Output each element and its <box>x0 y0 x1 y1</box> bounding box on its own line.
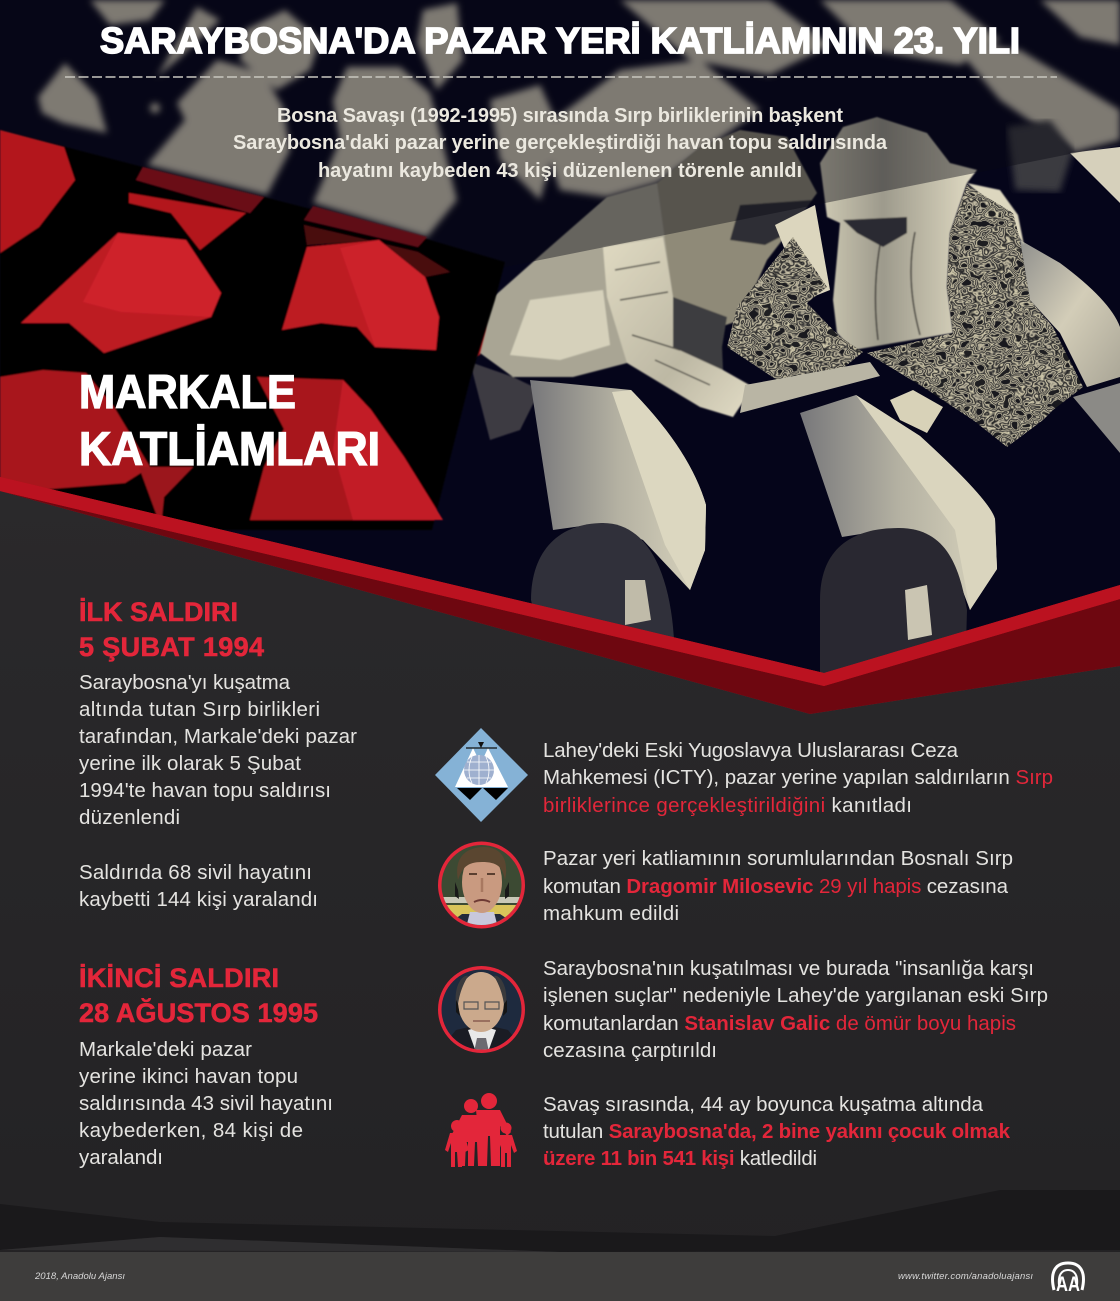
second attack section <box>79 963 333 1169</box>
coffin middle <box>800 395 997 610</box>
background photo illustration <box>0 0 1120 720</box>
first attack text: tarafından, Markale'deki pazar <box>79 725 357 748</box>
upper row of coffins <box>38 0 1120 237</box>
top dark overlay <box>0 0 1120 268</box>
Galic text: Saraybosna'nın kuşatılması ve burada "insanlığa karşı <box>543 957 1034 980</box>
footer url: www.twitter.com/anadoluajansı <box>898 1271 1033 1282</box>
coffin left <box>530 380 706 590</box>
woman right scarf <box>820 117 1024 350</box>
Milosevic text <box>543 847 1013 925</box>
first attack text: Saldırıda 68 sivil hayatını <box>79 861 312 884</box>
first attack text: yerine ilk olarak 5 Şubat <box>79 752 301 775</box>
right coffin lower <box>1073 383 1120 453</box>
icon: family <box>445 1093 517 1167</box>
title: SARAYBOSNA'DA PAZAR YERİ KATLİAMININ 23. YILI <box>100 20 1020 61</box>
woman left <box>457 130 817 440</box>
second attack heading: 28 AĞUSTOS 1995 <box>79 997 318 1028</box>
ICTY text: birliklerince gerçekleştirildiğini kanıtladı <box>543 794 912 817</box>
second attack heading <box>79 963 318 1028</box>
Milosevic text: komutan Dragomir Milosevic 29 yıl hapis cezasına <box>543 875 1009 898</box>
embroidered sleeves <box>867 185 1083 447</box>
main heading: MARKALE <box>79 365 296 418</box>
second attack text: saldırısında 43 sivil hayatını <box>79 1092 333 1115</box>
second attack text: kaybederken, 84 kişi de <box>79 1119 303 1142</box>
title divider <box>65 76 1057 78</box>
AA logo: AA <box>1056 1273 1080 1296</box>
casualties text: Savaş sırasında, 44 ay boyunca kuşatma altında <box>543 1093 984 1116</box>
Galic text: işlenen suçlar" nedeniyle Lahey'de yargılanan eski Sırp <box>543 984 1048 1007</box>
subtitle: Saraybosna'daki pazar yerine gerçekleştirdiği havan topu saldırısında <box>233 132 888 154</box>
second attack text: Markale'deki pazar <box>79 1038 252 1061</box>
hand <box>890 390 943 433</box>
first attack text: Saraybosna'yı kuşatma <box>79 671 291 694</box>
red coffins <box>0 130 505 530</box>
Milosevic text: Pazar yeri katliamının sorumlularından Bosnalı Sırp <box>543 847 1013 870</box>
lower dark panel with red chevron <box>0 477 1120 1301</box>
footer credit: 2018, Anadolu Ajansı <box>34 1271 125 1282</box>
casualties text: üzere 11 bin 541 kişi katledildi <box>543 1147 817 1170</box>
ICTY text: Lahey'deki Eski Yugoslavya Uluslararası Ceza <box>543 739 959 762</box>
ICTY text: Mahkemesi (ICTY), pazar yerine yapılan saldırıların Sırp <box>543 766 1053 789</box>
first attack text: düzenlendi <box>79 806 180 829</box>
second attack text: yerine ikinci havan topu <box>79 1065 298 1088</box>
icon: ICTY emblem <box>435 728 528 822</box>
right coffin upper <box>1020 240 1120 387</box>
portrait: Stanislav Galic <box>438 966 526 1054</box>
casualties text: tutulan Saraybosna'da, 2 bine yakını çocuk olmak <box>543 1120 1011 1143</box>
first attack text: kaybetti 144 kişi yaralandı <box>79 888 318 911</box>
pale triangle by face <box>775 205 830 300</box>
subtitle <box>233 105 888 182</box>
casualties text <box>543 1093 1011 1170</box>
first attack text <box>79 671 357 911</box>
subtitle: hayatını kaybeden 43 kişi düzenlenen törenle anıldı <box>318 160 802 182</box>
darker band <box>0 1190 1120 1252</box>
first attack text: 1994'te havan topu saldırısı <box>79 779 331 802</box>
Galic text: komutanlardan Stanislav Galic de ömür boyu hapis <box>543 1012 1016 1035</box>
second attack text <box>79 1038 333 1169</box>
second attack text: yaralandı <box>79 1146 163 1169</box>
ICTY text <box>543 739 1053 817</box>
subtitle: Bosna Savaşı (1992-1995) sırasında Sırp birliklerinin başkent <box>277 105 843 127</box>
Galic text <box>543 957 1048 1062</box>
main heading <box>79 365 380 475</box>
Galic text: cezasına çarptırıldı <box>543 1039 717 1062</box>
second attack heading: İKİNCİ SALDIRI <box>79 963 279 993</box>
Milosevic text: mahkum edildi <box>543 902 679 925</box>
first attack heading: İLK SALDIRI <box>79 597 238 627</box>
first attack heading <box>79 597 264 662</box>
AA logo <box>1053 1263 1083 1296</box>
portrait: Dragomir Milosevic <box>438 842 526 935</box>
main heading: KATLİAMLARI <box>79 422 380 475</box>
first attack section <box>79 597 357 911</box>
first attack heading: 5 ŞUBAT 1994 <box>79 632 264 662</box>
first attack text: altında tutan Sırp birlikleri <box>79 698 320 721</box>
